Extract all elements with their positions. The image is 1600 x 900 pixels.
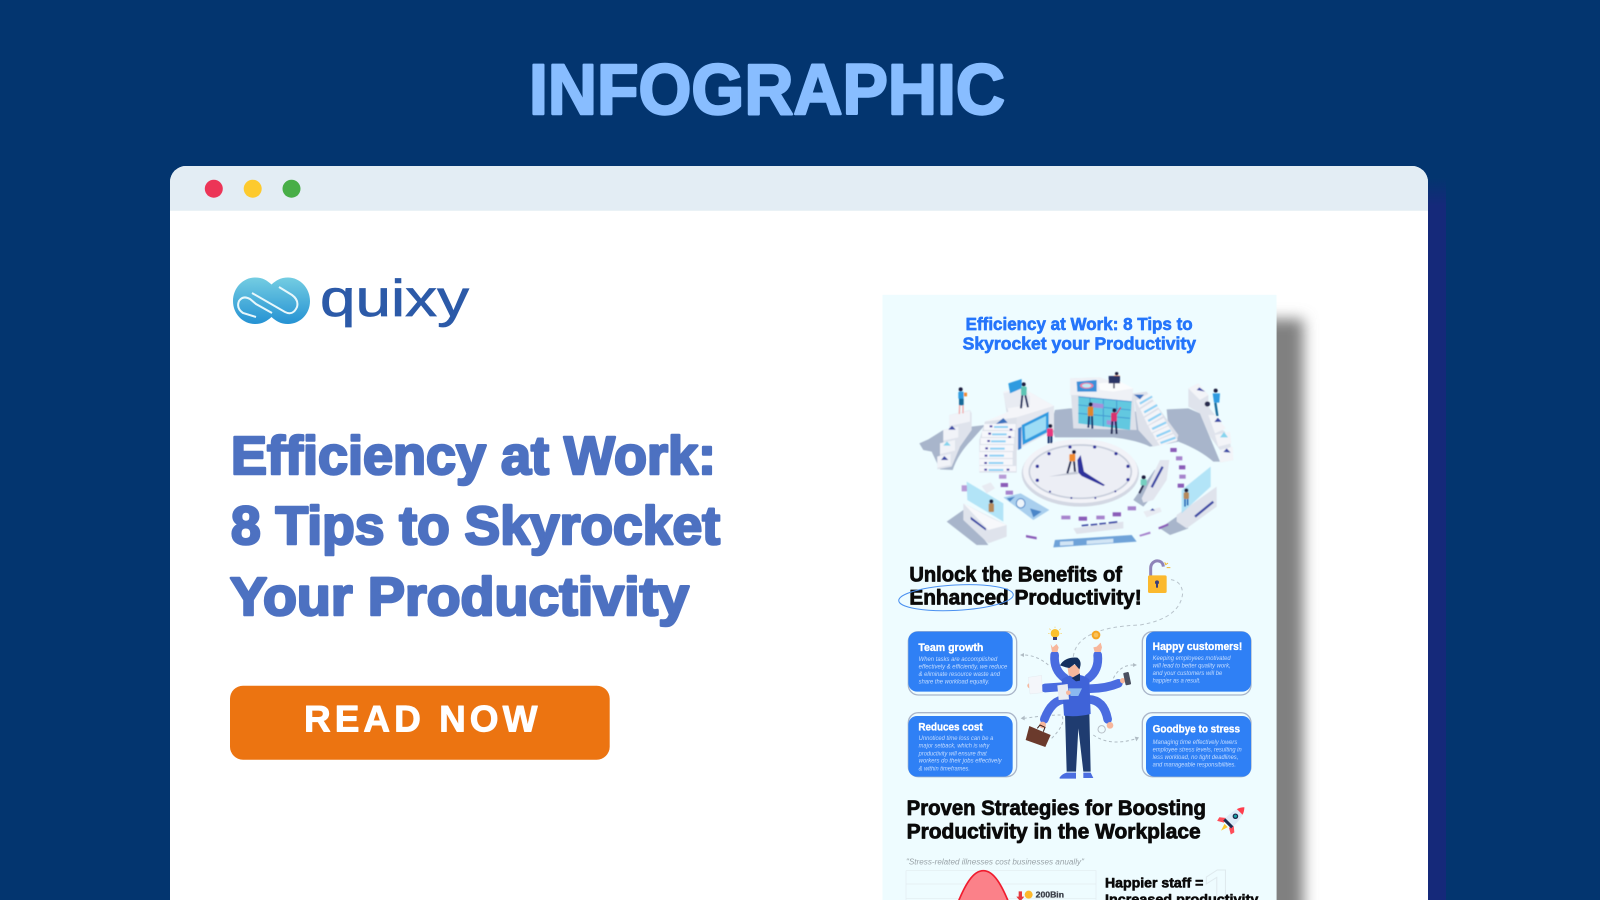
icon: rocket	[1214, 800, 1252, 838]
center step	[1073, 522, 1123, 534]
card: team growth: share the workload equally.	[919, 679, 989, 685]
wall screen	[1022, 412, 1049, 445]
heading: proven strategies: Proven Strategies for Boosting	[907, 796, 1206, 820]
dashed connector path	[1073, 579, 1183, 657]
icon: coin	[1025, 891, 1033, 899]
heading: proven strategies: Productivity in the Workplace	[907, 820, 1201, 844]
card: happy customers: happier as a result.	[1153, 679, 1201, 685]
browser window	[170, 166, 1428, 900]
headline: Efficiency at Work:	[231, 426, 716, 486]
card: happy customers: Happy customers!	[1153, 641, 1242, 653]
clock hands	[1048, 471, 1078, 477]
people at video wall	[1088, 402, 1121, 434]
infographic title: Skyrocket your Productivity	[963, 333, 1196, 353]
logo: quixy	[233, 270, 469, 328]
video wall	[1078, 397, 1132, 430]
card: team growth: effectively & efficiently, we reduce	[919, 665, 1008, 671]
right monitor kiosk	[1177, 467, 1217, 528]
window shadow band	[1427, 178, 1446, 900]
bell curve	[955, 871, 1012, 900]
card: goodbye to stress: less workload, no tight deadlines,	[1153, 755, 1238, 761]
bottom money	[1053, 535, 1137, 547]
card: goodbye to stress: employee stress levels, resulting in	[1153, 748, 1242, 754]
window control: green	[282, 180, 300, 198]
card: team growth	[908, 632, 1017, 695]
ground shadows	[919, 408, 1220, 545]
stair block	[1133, 392, 1178, 447]
icon: logo mark	[233, 278, 310, 324]
top monitor and person	[1003, 379, 1030, 408]
heading: unlock the benefits: Unlock the Benefits of	[909, 564, 1123, 587]
card: reduces cost: Unnoticed time loss can be a	[919, 736, 994, 742]
card: team growth: Team growth	[918, 642, 983, 654]
window title bar	[170, 166, 1428, 211]
chart caption: "Stress-related illnesses cost businesses anually"	[906, 857, 1085, 866]
clock ticks	[1036, 445, 1130, 499]
illustration: multi-armed worker	[1026, 627, 1131, 779]
left stepped building	[979, 388, 1054, 473]
person on right stairs	[1214, 389, 1218, 393]
head and hair	[1060, 658, 1081, 681]
card: goodbye to stress	[1142, 713, 1251, 777]
person on left stairs	[958, 387, 967, 414]
headline	[230, 426, 720, 627]
heading: proven strategies	[907, 796, 1206, 844]
strategy heading: Happier staff =	[1105, 874, 1203, 890]
top worker at desk	[1109, 372, 1120, 388]
infographic title	[963, 314, 1196, 353]
title: INFOGRAPHIC	[529, 51, 1005, 130]
person in pink	[1047, 424, 1053, 443]
window control: red	[205, 180, 223, 198]
illustration: isometric clock workspace	[919, 372, 1233, 547]
card: reduces cost	[908, 713, 1017, 777]
card: happy customers	[1142, 632, 1251, 695]
headline: Your Productivity	[230, 567, 689, 627]
right seat and person	[1139, 460, 1169, 517]
card: happy customers: and your customers will be	[1153, 671, 1223, 677]
icon: light bulb	[1048, 627, 1062, 640]
card: reduces cost: workers do their jobs effectively	[919, 759, 1003, 765]
strategy heading	[1105, 874, 1259, 900]
magnifier	[1098, 726, 1105, 733]
card: reduces cost: Reduces cost	[918, 721, 983, 733]
arrows: dashed connectors	[1020, 653, 1139, 742]
shoes	[1059, 773, 1093, 779]
heading: unlock the benefits: Enhanced Productivity!	[909, 586, 1142, 609]
card: goodbye to stress: Managing time effectively lowers	[1153, 740, 1237, 746]
person on clock	[1072, 450, 1076, 454]
card: reduces cost: productivity will ensure that	[918, 751, 987, 757]
arms	[1044, 655, 1118, 719]
phone	[1123, 672, 1131, 685]
card: happy customers: will lead to better quality work,	[1153, 664, 1231, 670]
card: goodbye to stress: Goodbye to stress	[1153, 723, 1240, 735]
card: team growth: When tasks are accomplished	[919, 657, 998, 663]
trousers	[1065, 712, 1091, 772]
infographic thumbnail shadow	[1276, 309, 1314, 900]
center building with video wall	[1070, 377, 1178, 447]
card: happy customers: Keeping employees motivated	[1153, 656, 1231, 662]
clipboard and pocket	[1057, 684, 1082, 700]
right staircase	[1188, 386, 1232, 454]
button: read now	[230, 686, 610, 760]
icon: unlocked padlock	[1148, 561, 1170, 593]
document	[1028, 675, 1042, 694]
torso	[1062, 675, 1091, 716]
purple path segments	[962, 448, 1186, 539]
briefcase	[1026, 725, 1051, 747]
hands	[1027, 643, 1125, 729]
highlight ellipse	[898, 584, 1014, 612]
button: read now: READ NOW	[304, 699, 538, 740]
clock	[1022, 439, 1139, 507]
icon: down arrow	[1016, 891, 1024, 900]
card: team growth: & eliminate resource waste and	[919, 672, 1001, 678]
window control: yellow	[244, 180, 262, 198]
panel: infographic thumbnail	[882, 295, 1277, 900]
left monitor kiosk	[963, 482, 1007, 543]
card: reduces cost: major setback, which is why	[919, 744, 990, 750]
bell curve chart	[906, 871, 1096, 900]
icon: coin	[1092, 631, 1100, 639]
value label: 200Bin	[1036, 890, 1064, 899]
logo wordmark: quixy	[320, 270, 469, 328]
card: goodbye to stress: and manageable responsibilities.	[1153, 763, 1236, 769]
left staircase	[937, 410, 972, 469]
heading: unlock the benefits	[898, 564, 1142, 613]
money graphic	[1003, 493, 1049, 520]
headline: 8 Tips to Skyrocket	[231, 496, 720, 556]
card: reduces cost: & within timeframes.	[919, 767, 970, 773]
infographic title: Efficiency at Work: 8 Tips to	[966, 314, 1193, 334]
